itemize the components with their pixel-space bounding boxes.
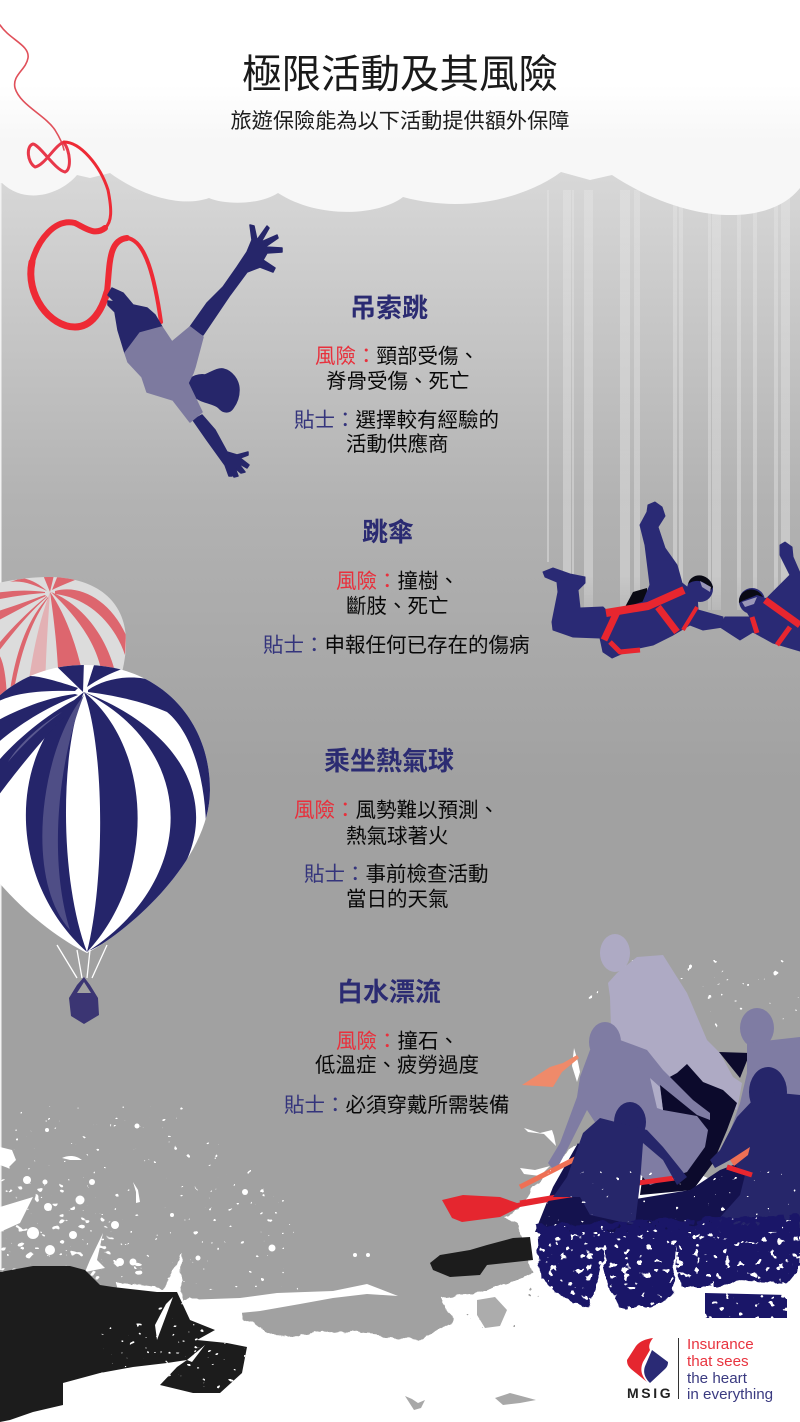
tagline: Insurance (687, 1336, 754, 1353)
section: bungee jumping (294, 293, 499, 456)
tip: 貼士：事前檢查活動 (304, 863, 488, 886)
heading: 吊索跳 (350, 293, 428, 323)
spray speckles right (570, 960, 800, 1060)
tagline (687, 1336, 773, 1403)
heading: 白水漂流 (337, 977, 441, 1007)
heading: 乘坐熱氣球 (324, 746, 454, 776)
rafters (442, 934, 800, 1318)
section: skydiving (263, 517, 530, 657)
section: bungee jumping: 脊骨受傷、死亡 (326, 370, 470, 393)
section: bungee jumping: 活動供應商 (346, 432, 448, 456)
risks: 風險：撞樹、 (336, 570, 459, 593)
sky streaks (547, 190, 790, 610)
tip: 貼士：申報任何已存在的傷病 (263, 634, 530, 657)
rock highlights (155, 1297, 205, 1362)
foam streak (183, 1284, 398, 1313)
balloon basket (69, 977, 99, 1024)
left gores (0, 676, 78, 703)
balloon envelope (0, 665, 210, 953)
logo wordmark: MSIG (627, 1385, 673, 1401)
section: hot air balloon: 熱氣球著火 (346, 825, 448, 848)
small rock (430, 1237, 533, 1277)
balloon ropes (57, 945, 107, 978)
front rafters (553, 1067, 800, 1232)
distant foam specks (405, 1393, 536, 1410)
heading: 跳傘 (362, 517, 414, 547)
raft bottom speckled (535, 1215, 800, 1308)
spray blobs left (0, 1147, 140, 1272)
skydivers (543, 502, 800, 658)
skydiver two (720, 542, 800, 651)
jumper arms and head (188, 225, 282, 477)
section: whitewater rafting: 低溫症、疲勞過度 (315, 1054, 479, 1077)
black rocks (0, 1237, 533, 1422)
salmon paddle (522, 1055, 579, 1087)
red hot air balloon (0, 577, 126, 695)
cloud (0, 0, 800, 215)
MSIG logo (627, 1336, 773, 1403)
raft specks (540, 1170, 800, 1232)
tagline: the heart (687, 1370, 748, 1387)
risks: 風險：風勢難以預測、 (294, 799, 499, 822)
section: whitewater rafting (284, 977, 510, 1117)
bungee jumper (108, 225, 282, 477)
title: 極限活動及其風險 (242, 53, 558, 97)
tip: 貼士：必須穿戴所需裝備 (284, 1094, 510, 1117)
skydiver one (543, 502, 723, 658)
back rafter (600, 934, 742, 1110)
risks: 風險：頸部受傷、 (315, 345, 479, 368)
bungee rope (0, 25, 161, 327)
grey foam patches (440, 1280, 540, 1340)
raft hull (535, 1140, 800, 1232)
jumper legs (108, 288, 162, 353)
central gores (84, 692, 138, 952)
logo divider (678, 1338, 679, 1399)
tagline: that sees (687, 1353, 749, 1370)
logo mark (627, 1338, 668, 1383)
navy hot air balloon (0, 660, 230, 1024)
tip: 貼士：選擇較有經驗的 (294, 409, 499, 432)
middle rafter (548, 1008, 800, 1185)
section: hot air balloon (294, 746, 499, 911)
subtitle: 旅遊保險能為以下活動提供額外保障 (230, 109, 570, 133)
paddles and ropes (442, 1158, 752, 1222)
top wedges (58, 665, 84, 692)
right rim gore (88, 678, 210, 820)
raft dark interior (640, 1052, 750, 1195)
risks: 風險：撞石、 (336, 1030, 459, 1053)
large rock (0, 1266, 247, 1422)
section: skydiving: 斷肢、死亡 (346, 595, 448, 618)
light patch (650, 1078, 663, 1110)
white water foam (0, 960, 800, 1422)
section: hot air balloon: 當日的天氣 (346, 888, 448, 911)
jumper shirt (125, 327, 203, 422)
spray speckles left (0, 1105, 300, 1290)
tagline: in everything (687, 1386, 773, 1403)
